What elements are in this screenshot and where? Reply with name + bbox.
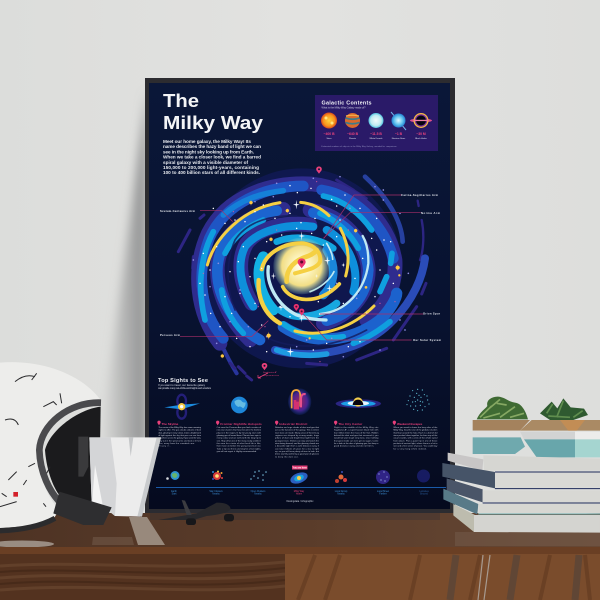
arm labels: Perseus Arm <box>160 333 181 337</box>
sight: frontier nightlife hotspots: Out near the Perseus Arm you find a scatter of <box>217 426 261 429</box>
timeline labels: Start <box>172 492 177 496</box>
sight: industrial district: can take millions of years for a star to light <box>275 447 319 450</box>
sight: industrial district: youngest stars. Visitors can stop and watch the <box>275 439 320 442</box>
timeline <box>156 466 446 503</box>
sight: weekend escapes: stars packed close together, far from any of the <box>393 434 438 437</box>
timeline axis <box>156 487 446 488</box>
arm labels <box>160 193 442 342</box>
timeline icon: milky way <box>289 470 309 486</box>
helmet lower edge <box>0 518 55 531</box>
panel: galactic contents <box>315 95 438 151</box>
W letter ornament <box>89 437 161 517</box>
sight: weekend escapes <box>393 421 438 450</box>
sight: weekend escapes: see and a fine sense of peace. You could stay <box>393 445 438 448</box>
core glow <box>273 238 330 294</box>
icon: weekend escapes <box>407 389 429 411</box>
intro text block: see in the night sky looking up from Earth. <box>163 149 254 154</box>
inner rings <box>240 226 355 317</box>
white sparkle stars <box>271 200 345 357</box>
pale blue-white arms <box>268 236 368 320</box>
dark outer purple arcs <box>178 177 426 380</box>
pot left <box>473 420 530 454</box>
panel heading: Galactic Contents <box>322 100 372 106</box>
arm labels: Our Solar System <box>413 338 442 342</box>
galaxy disc base <box>202 168 402 368</box>
contents figures <box>323 132 426 136</box>
lower cabinet left <box>0 554 285 600</box>
book 5 <box>453 504 600 533</box>
icon: black holes <box>410 113 432 128</box>
star dots <box>200 186 393 352</box>
arm labels: Norma Arm <box>421 211 441 215</box>
book 4 <box>443 489 600 514</box>
contents labels: Stars <box>326 137 332 140</box>
poster frame <box>145 78 455 514</box>
helmet scribbles <box>0 373 62 507</box>
top sights subheading: If you want to travel, our favourite galaxy <box>158 383 206 387</box>
dark lanes between arms <box>228 216 367 346</box>
sight: the city center: would not want to get very close, since nothing <box>334 437 379 440</box>
title: The <box>163 90 199 111</box>
sight: frontier nightlife hotspots: see. Stop off at one of the many rocky worlds in <box>217 439 262 442</box>
sight: the city center <box>334 421 379 448</box>
timeline labels: Nearby <box>254 492 263 496</box>
here marker <box>292 466 308 470</box>
sight: the city center: Right in the middle of the Milky Way sits <box>334 426 378 429</box>
arm labels: Scutum-Centaurus Arm <box>160 209 196 213</box>
sight: industrial district: stars being formed, and the glowing clouds are <box>275 442 320 445</box>
sight: frontier nightlife hotspots: you will not regret it. Highly recommended. <box>217 450 257 453</box>
sight: the skyline: afar, away from the crowded core. <box>158 442 195 445</box>
sight: frontier nightlife hotspots: glowing gas all round them. Planets here spin in <box>217 434 262 437</box>
icon: planets <box>345 113 360 128</box>
callout: sagittarius pin <box>258 363 280 378</box>
icon: industrial district <box>288 388 311 415</box>
sight: the skyline: anywhere across the galaxy. If you want the view, <box>158 437 201 440</box>
icon: neutron stars <box>391 112 406 130</box>
pot right <box>520 420 600 457</box>
sight: industrial district: dress warmly and bring a good pair of glasses <box>275 453 319 456</box>
callout: sagittarius pin: Supermassive <box>263 374 280 377</box>
title <box>163 90 264 133</box>
sight: the city center: four million times the mass of the Sun. Hidden <box>334 431 379 434</box>
intro text block: Meet our home galaxy, the Milky Way! Its <box>163 139 251 144</box>
arm labels: Orion Spur <box>423 312 440 316</box>
sight: the skyline <box>157 421 202 448</box>
here marker: You are here <box>293 466 308 470</box>
timeline icon: star cluster red <box>212 470 223 480</box>
sight: industrial district: Industrial District <box>279 422 307 426</box>
icon: the skyline <box>164 395 200 419</box>
contents labels: White Dwarfs <box>369 137 383 140</box>
contents labels <box>326 137 428 140</box>
sight: the city center: good distance away and do not fall in. <box>334 445 374 448</box>
sight: industrial district: to keep the dust out. <box>275 455 299 458</box>
contents figures: ~30 M <box>416 132 426 136</box>
sight: industrial district: pillars of dust and bright blue light from the <box>275 437 320 440</box>
icon: the city center <box>336 397 381 408</box>
shelf surface <box>0 513 600 547</box>
top sights text columns <box>157 421 438 458</box>
top sights heading: Top Sights to See <box>158 378 208 384</box>
top sights subheading: can provide many out-of-this-world sights and wonders <box>158 386 212 390</box>
sight: weekend escapes: Milky Way, head for one of the globular clusters <box>393 429 437 432</box>
toy airplane <box>158 500 234 525</box>
top pin <box>316 166 322 174</box>
contents labels: Planets <box>349 137 357 140</box>
plants <box>477 397 588 420</box>
sight: the skyline: sights to offer. The gas clouds and jets of dark <box>158 429 202 432</box>
top sights subheading <box>158 383 212 390</box>
helmet rim <box>39 403 101 502</box>
timeline icon: scattered stars <box>251 471 266 480</box>
sight: the city center: behind the dust and gas that surround it, you <box>334 434 379 437</box>
sight: frontier nightlife hotspots: then move on before the young stars burn out. <box>217 445 261 448</box>
helmet <box>0 362 101 531</box>
intro text block: spiral galaxy with a visible diameter of <box>163 160 248 165</box>
timeline labels: Local Sheet <box>377 490 389 493</box>
sight: weekend escapes: Weekend Escapes <box>397 422 423 426</box>
sight: frontier nightlife hotspots: the area for a taste of what local life is like, <box>217 442 261 445</box>
sight: weekend escapes: When you need to leave the busy disc of the <box>393 426 438 429</box>
helmet interior <box>45 407 101 505</box>
sight: the city center: that goes inside can ever get out again. Come <box>334 439 379 442</box>
sight: industrial district: regions are shaped by strong winds, huge <box>275 434 320 437</box>
helmet strap <box>53 492 112 525</box>
arm labels: Carina-Sagittarius Arm <box>401 193 439 197</box>
sight: frontier nightlife hotspots: Frontier Nightlife Hotspots <box>220 422 262 426</box>
sight: frontier nightlife hotspots: Take a trip out there and stay for a few nights, <box>217 447 261 450</box>
timeline labels: Beyond <box>420 494 429 496</box>
timeline icon: red cluster <box>335 471 347 483</box>
sight: the skyline: stay out in the spiral arms and look at it from <box>158 439 201 442</box>
shelf reflections <box>0 510 600 548</box>
sight: industrial district: Nebulae are huge clouds of dust and gas that <box>275 426 319 429</box>
leader lines and label lines <box>180 195 423 340</box>
sight: the city center: The City Center <box>338 422 363 426</box>
intro text block: When we take a closer look, we find a barred <box>163 155 261 160</box>
helmet shell <box>0 362 101 528</box>
icon: white dwarfs <box>368 113 384 128</box>
intro text block <box>163 139 261 175</box>
intro text block: name describes the hazy band of light we can <box>163 144 261 149</box>
timeline labels: Nearby <box>212 492 221 496</box>
timeline icon: purple cluster <box>376 470 390 484</box>
sight: weekend escapes: pockets of ancient light, where there is a lot to <box>393 442 438 445</box>
yellow arms <box>207 202 374 333</box>
timeline labels: Milky Way <box>294 491 305 493</box>
shelf front lip <box>0 547 600 554</box>
outer arms blue <box>202 186 425 354</box>
sight: weekend escapes: usual crowds, with a view of the whole spiral <box>393 437 438 440</box>
contents figures: ~1 B <box>395 132 403 136</box>
credit line: flowingdata / infographic <box>287 500 314 503</box>
sight: industrial district <box>275 421 320 458</box>
timeline labels: Nearby <box>337 492 346 496</box>
book 1 <box>448 453 600 471</box>
sight: the skyline: of light against the sky that you can see from <box>158 434 201 437</box>
contents footnote: Estimated numbers of objects in the Milky Way Galaxy, rounded for comparison <box>322 145 397 148</box>
gold stars <box>220 199 400 359</box>
timeline labels: Open Clusters <box>251 490 266 493</box>
poster shadow on wall <box>100 90 147 445</box>
title: Milky Way <box>163 112 264 133</box>
sight: weekend escapes: that float around the halo. Each is a ball of old <box>393 431 438 434</box>
cyan arm bands <box>201 191 392 355</box>
callout: sagittarius pin: Sagittarius A* <box>263 371 277 374</box>
sight: the skyline: Enjoy it. <box>158 445 171 448</box>
sight: frontier nightlife hotspots: places in the region, lit by hot young stars with <box>217 431 262 434</box>
timeline icon: solar neighbourhood <box>166 471 180 480</box>
icon: frontier hotspots <box>231 397 248 413</box>
location pins <box>294 258 306 316</box>
contents figures: ~400 B <box>323 132 335 136</box>
intro text block: 100 to 400 billion stars of all different kinds. <box>163 170 260 175</box>
contents figures: ~11.5 B <box>370 132 382 136</box>
contents figures: ~640 B <box>347 132 359 136</box>
sight: the skyline: dust, glowing in every colour, make a bright band <box>158 431 202 434</box>
contents labels: Black Holes <box>415 138 428 140</box>
sight: weekend escapes: for a very long while indeed. <box>393 447 427 450</box>
contents labels: Neutron Stars <box>392 137 406 140</box>
sight: the skyline: The centre of the Milky Way has some amazing <box>158 426 202 429</box>
icon: stars <box>321 112 337 128</box>
timeline labels: Farther <box>379 492 387 496</box>
stack of books and pots <box>442 397 600 533</box>
timeline labels: Home <box>296 494 303 496</box>
top sights icons <box>164 388 429 419</box>
sight: the city center: for a look at the disc of glowing gas, but keep a <box>334 442 379 445</box>
timeline labels: Local Group <box>335 490 348 493</box>
intro text block: 150,000 to 200,000 light-years, containing <box>163 165 259 170</box>
timeline icon: far cluster <box>417 470 430 482</box>
sight: frontier nightlife hotspots <box>216 421 262 453</box>
timeline labels: Earth <box>171 490 177 493</box>
timeline labels: Star Clusters <box>209 490 223 493</box>
helmet red dot <box>13 492 18 497</box>
book 2 <box>442 463 600 488</box>
sight: industrial district: act as the factories of the galaxy. This is where <box>275 429 320 432</box>
sight: industrial district: new stars are made. Many areas of these busy <box>275 431 320 434</box>
panel subheading: What is the Milky Way Galaxy made of? <box>322 106 366 110</box>
sight: frontier nightlife hotspots: every colour and are well worth the long trip to <box>217 437 262 440</box>
lower cabinet right <box>285 554 600 600</box>
sight: industrial district: up, so you will have plenty of time to look, but <box>275 450 319 453</box>
timeline labels: Laniakea <box>419 491 429 493</box>
book 3 <box>447 478 600 502</box>
sight: the skyline: The Skyline <box>162 422 179 426</box>
sight: weekend escapes: from above. Plan a quiet trip in one of these <box>393 439 438 442</box>
sight: industrial district: a beautiful sight from a safe distance away. It <box>275 445 319 448</box>
outer arm purple base <box>199 184 395 343</box>
sight: the city center: Sagittarius A*, a supermassive black hole with <box>334 429 379 432</box>
poster <box>149 83 450 509</box>
spiral galaxy chart <box>178 168 426 380</box>
sight: frontier nightlife hotspots: new star clusters that have become the liveliest <box>217 429 261 432</box>
timeline labels <box>171 490 429 496</box>
